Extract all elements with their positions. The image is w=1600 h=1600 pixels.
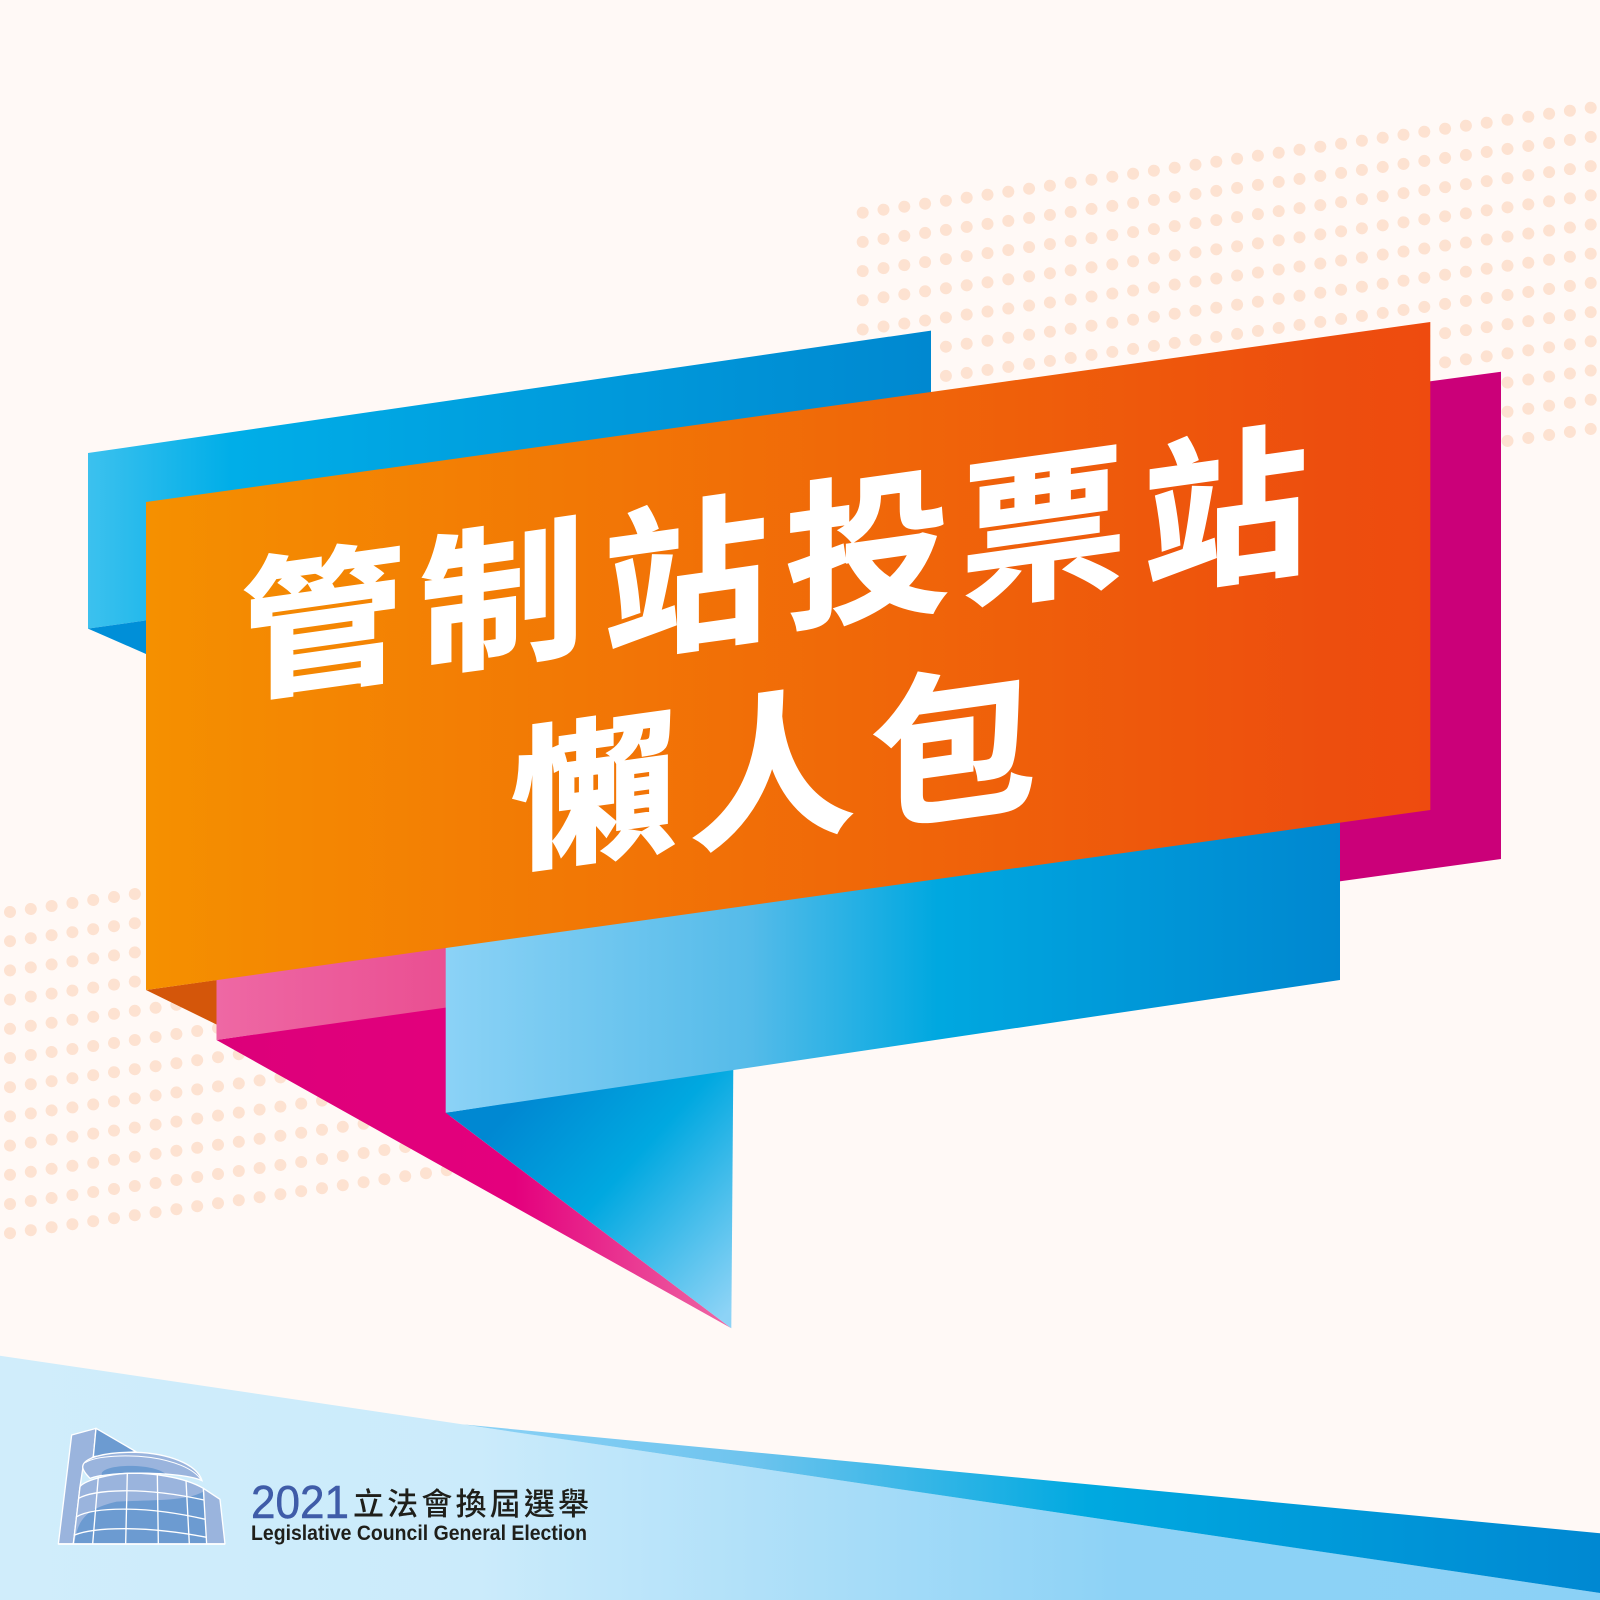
ribbon: magenta tail triangle (216, 1005, 731, 1328)
title line 1: 管 (240, 529, 405, 721)
dot pattern: top right (863, 108, 1592, 534)
ribbon: right magenta band (1335, 372, 1501, 882)
ribbon: lower blue band (446, 815, 1340, 1113)
title line 2: 包 (871, 648, 1036, 854)
dot pattern: lower left (10, 849, 448, 1233)
election name English: Legislative Council General Election (251, 1522, 587, 1545)
title line 1: 票 (961, 431, 1126, 631)
bottom light blue band (0, 1356, 1600, 1600)
icon: Legislative Council building logo (58, 1428, 225, 1544)
ribbon: main orange banner (146, 322, 1430, 990)
title line 1: 制 (420, 504, 585, 696)
title line 1 (240, 411, 1308, 721)
title line 1: 投 (785, 454, 950, 653)
bottom blue wedge (463, 1424, 1600, 1593)
ribbon: blue fold (88, 620, 146, 654)
election year: 2021 (251, 1476, 349, 1528)
title line 2: 人 (690, 672, 855, 874)
ribbon: upper back blue band (88, 331, 931, 629)
title line 1: 站 (603, 480, 768, 683)
title line 2 (511, 648, 1036, 894)
ribbon: blue tail triangle (446, 1068, 733, 1328)
title line 2: 懶 (511, 697, 676, 894)
election name Chinese: 立法會換屆選舉 (353, 1487, 589, 1522)
ribbon: pink band (216, 942, 450, 1040)
ribbon: dark orange fold (146, 980, 216, 1024)
title line 1: 站 (1143, 411, 1308, 618)
